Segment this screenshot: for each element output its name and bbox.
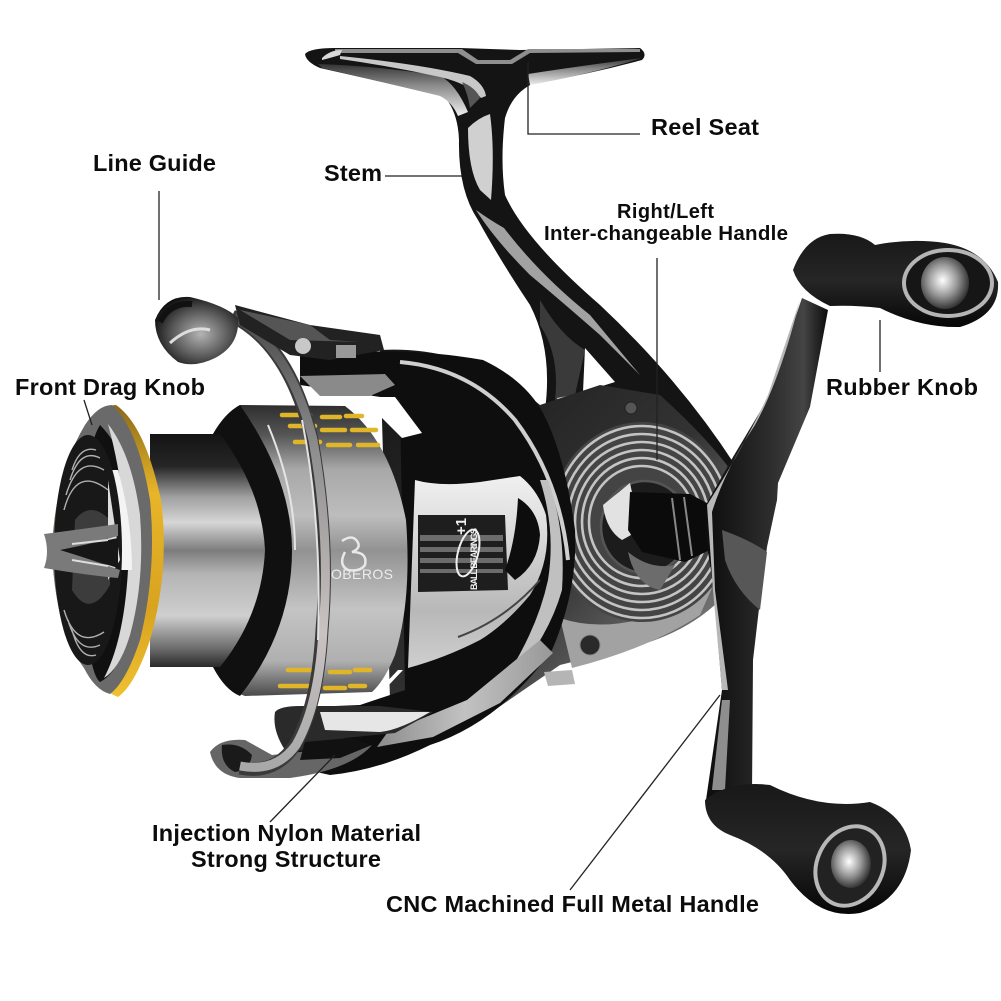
handle: CNC metal arms [705,298,828,800]
bearing mark: +1 [453,518,470,535]
logo: OBEROS brand mark: OBEROS [331,566,393,582]
screw details [544,402,637,686]
bearing mark [452,518,484,590]
reel seat and stem [305,48,735,500]
bail foot [210,706,433,778]
label: Inter-changeable Handle: Inter-changeable Handle [544,222,788,245]
label: Line Guide: Line Guide [93,150,216,176]
label: Right/Left: Right/Left [617,201,714,223]
bail arm [235,305,384,360]
front drag knob [44,405,164,697]
leader lines [84,62,880,890]
spindle shaft [603,483,720,590]
reel body and gear housing [380,350,738,720]
icon: line guide roller [155,297,238,364]
spool with line holes [150,405,408,696]
label: CNC Machined Full Metal Handle: CNC Machined Full Metal Handle [386,891,759,917]
label: Rubber Knob: Rubber Knob [826,374,978,400]
label: Strong Structure: Strong Structure [191,846,381,872]
icon: lower rubber knob [705,784,911,917]
bail wire [232,316,325,769]
label: Stem: Stem [324,160,382,186]
label: Reel Seat: Reel Seat [651,114,759,140]
logo: OBEROS brand mark [331,538,393,582]
rotor crescent and hub [285,351,575,775]
label: Injection Nylon Material: Injection Nylon Material [152,820,421,846]
icon: concentric gear disk [554,426,730,618]
bearing mark: BALL BEARINGS [469,528,479,590]
icon: upper rubber knob [793,234,998,327]
label: Front Drag Knob: Front Drag Knob [15,374,205,400]
